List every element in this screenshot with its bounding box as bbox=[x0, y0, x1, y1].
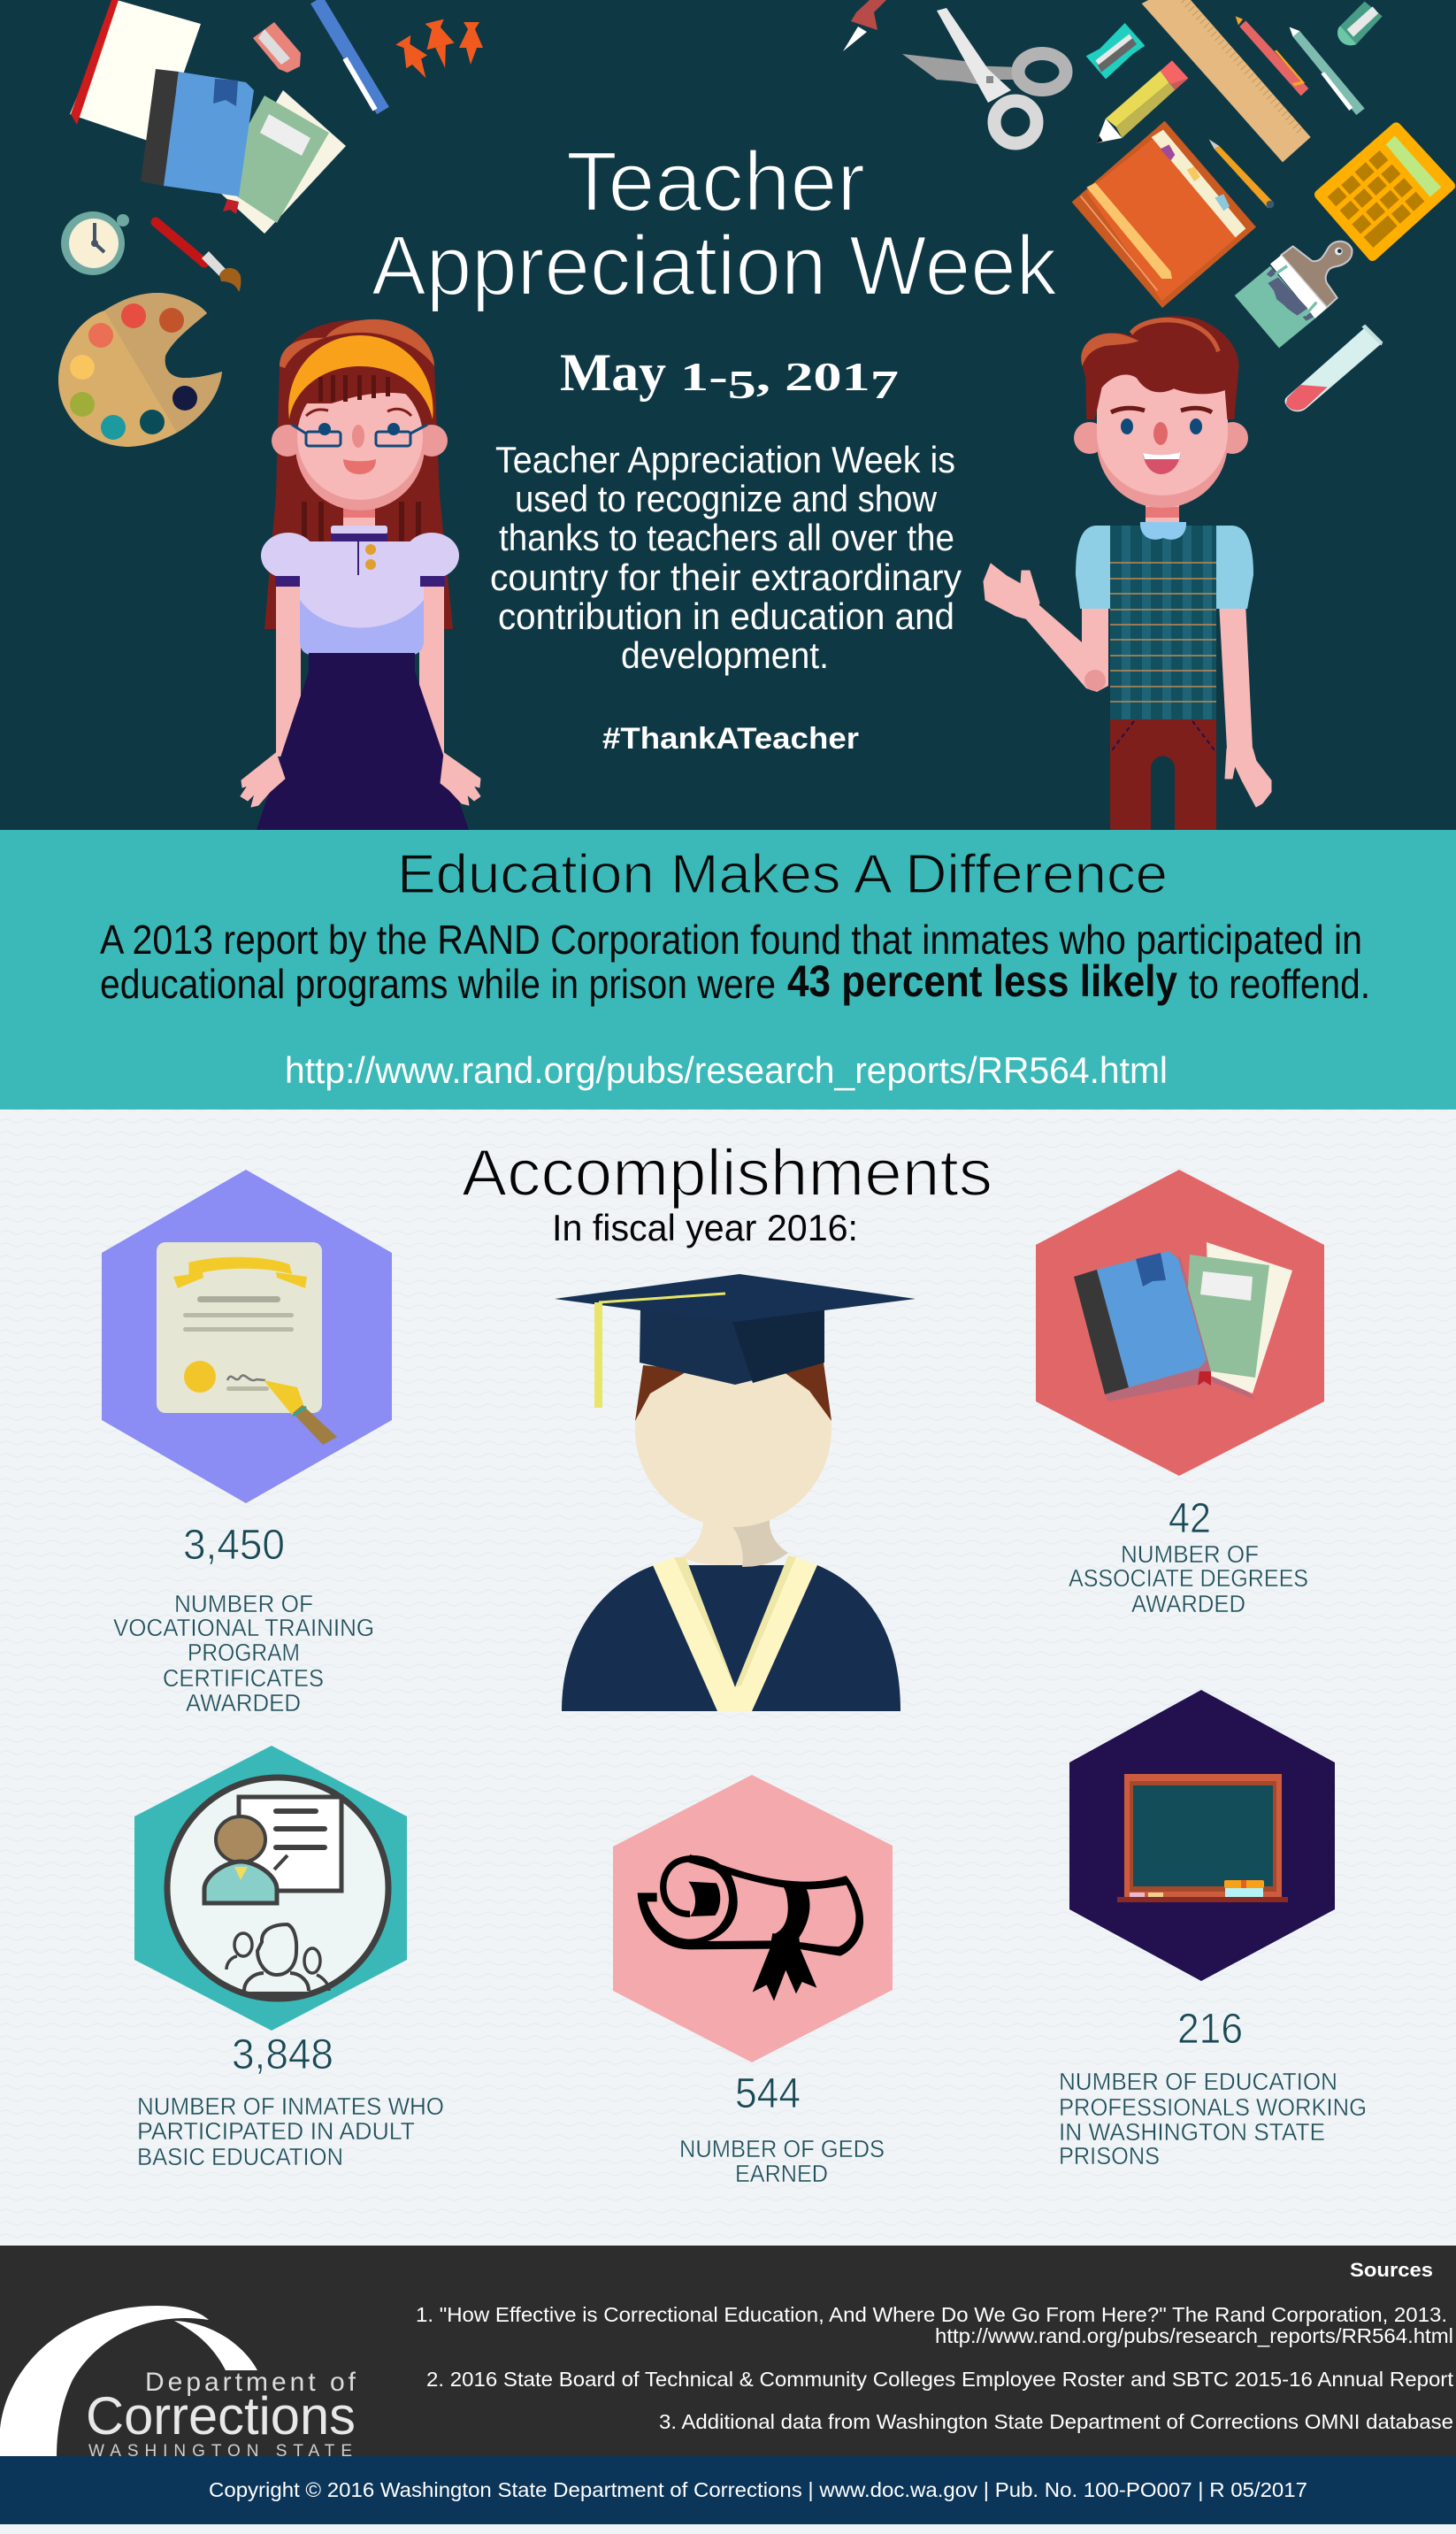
label: BASIC EDUCATION bbox=[137, 2143, 343, 2170]
logo: Department of Corrections: Corrections bbox=[86, 2386, 356, 2446]
icon: push pins bbox=[393, 18, 483, 84]
icon: blue pen bbox=[317, 0, 383, 111]
text block: RAND finding: to reoffend. bbox=[1189, 961, 1370, 1007]
value: 544 bbox=[735, 2070, 801, 2117]
text block: source list bbox=[416, 2303, 1454, 2433]
copyright text: Copyright © 2016 Washington State Department of Corrections | www.doc.wa.gov | Pub. No. 100-PO007 | R 05/2017 bbox=[209, 2478, 1307, 2501]
icon: test tube bbox=[1285, 325, 1383, 411]
icon: paint palette bbox=[58, 293, 222, 447]
icon: small pencil bbox=[1209, 139, 1274, 208]
label: PRISONS bbox=[1059, 2142, 1160, 2169]
hashtag: #ThankATeacher bbox=[602, 722, 859, 756]
text block: description: used to recognize and show bbox=[515, 478, 938, 519]
label: NUMBER OF GEDS bbox=[679, 2135, 885, 2162]
heading: sources: Sources bbox=[1350, 2259, 1433, 2281]
icon: white notebook bbox=[70, 0, 201, 142]
text block: source list: 3. Additional data from Washington State Department of Corrections OMNI database bbox=[659, 2410, 1453, 2433]
icon: paint brush red bbox=[156, 222, 241, 292]
date: 5 bbox=[728, 362, 756, 407]
icon: scissors bbox=[902, 8, 1066, 143]
value: 42 bbox=[1169, 1495, 1211, 1542]
value: 3,450 bbox=[183, 1522, 285, 1569]
icon: push pin red bbox=[843, 0, 886, 51]
subheading: In fiscal year 2016: bbox=[552, 1207, 858, 1248]
label: IN WASHINGTON STATE bbox=[1059, 2118, 1325, 2146]
value: 216 bbox=[1177, 2006, 1243, 2053]
icon: classroom bbox=[167, 1778, 388, 2001]
stat: adult basic education bbox=[134, 1746, 444, 2170]
date: , 201 bbox=[756, 354, 870, 399]
text block: source list: http://www.rand.org/pubs/research_reports/RR564.html bbox=[935, 2324, 1453, 2347]
text block: description bbox=[490, 439, 962, 676]
text block: description: contribution in education and bbox=[498, 595, 954, 637]
stat: vocational certificates bbox=[102, 1170, 392, 1716]
label: NUMBER OF bbox=[1121, 1540, 1259, 1568]
label: PARTICIPATED IN ADULT bbox=[137, 2117, 415, 2145]
label bbox=[113, 1590, 374, 1716]
icon: sharpener bbox=[1086, 23, 1145, 79]
panel: education makes a difference bbox=[0, 830, 1456, 1110]
panel: header bbox=[0, 0, 1456, 830]
title bbox=[372, 134, 1058, 313]
sleeves and vest bbox=[1026, 522, 1253, 749]
hands bbox=[984, 564, 1271, 807]
title: Teacher bbox=[566, 134, 865, 229]
text block: description: thanks to teachers all over the bbox=[499, 517, 954, 558]
blouse bbox=[261, 526, 459, 756]
label: ASSOCIATE DEGREES bbox=[1069, 1564, 1308, 1592]
panel: accomplishments bbox=[0, 1110, 1456, 2246]
logo: Department of Corrections bbox=[0, 2306, 356, 2461]
icon: graduate bbox=[555, 1274, 916, 1711]
label bbox=[679, 2135, 885, 2187]
label: NUMBER OF EDUCATION bbox=[1059, 2068, 1337, 2095]
icon: teal pen bbox=[1290, 27, 1365, 115]
label: AWARDED bbox=[1131, 1590, 1245, 1617]
icon: blue book bbox=[141, 69, 254, 196]
icon: orange book bbox=[1072, 121, 1256, 308]
icon: certificate bbox=[157, 1242, 337, 1445]
icon: ruler bbox=[1142, 0, 1311, 162]
logo: Department of Corrections: Department of bbox=[145, 2368, 356, 2397]
stat: education professionals bbox=[1059, 1690, 1367, 2169]
label bbox=[137, 2092, 444, 2170]
label bbox=[1069, 1540, 1308, 1617]
label: PROFESSIONALS WORKING bbox=[1059, 2093, 1367, 2121]
label: NUMBER OF INMATES WHO bbox=[137, 2092, 444, 2120]
icons: desk tools bbox=[1072, 0, 1450, 308]
icon: yellow pencil bbox=[1096, 60, 1188, 143]
label: PROGRAM bbox=[188, 1639, 300, 1666]
trousers bbox=[1110, 719, 1216, 830]
heading: Accomplishments bbox=[462, 1136, 992, 1209]
icon: green eraser bbox=[1337, 2, 1383, 45]
label: VOCATIONAL TRAINING bbox=[113, 1614, 374, 1641]
hair bbox=[1081, 316, 1238, 419]
hands bbox=[241, 753, 480, 807]
glasses bbox=[292, 425, 427, 446]
label: NUMBER OF bbox=[174, 1590, 313, 1617]
label: AWARDED bbox=[186, 1689, 301, 1716]
character: male teacher bbox=[984, 316, 1271, 830]
date: May bbox=[560, 343, 666, 402]
value: 3,848 bbox=[232, 2031, 333, 2078]
icon: stopwatch bbox=[61, 211, 129, 275]
date: 7 bbox=[870, 362, 899, 407]
skirt bbox=[257, 653, 469, 830]
panel: copyright bar bbox=[0, 2456, 1456, 2524]
icon: red pen bbox=[1236, 16, 1308, 96]
stat: associate degrees bbox=[1036, 1170, 1324, 1617]
date bbox=[560, 343, 899, 407]
icon: wide paint brush bbox=[1235, 242, 1353, 348]
link: http://www.rand.org/pubs/research_reports/RR564.html bbox=[285, 1049, 1168, 1091]
icon: chalkboard bbox=[1117, 1774, 1288, 1902]
text block: RAND finding bbox=[100, 917, 1370, 1007]
icon: books bbox=[1074, 1242, 1292, 1401]
icon: eraser bbox=[253, 22, 301, 73]
character: female teacher bbox=[241, 319, 480, 830]
text block: description: country for their extraordinary bbox=[490, 557, 962, 598]
text block: RAND finding: 43 percent less likely bbox=[787, 956, 1177, 1006]
icon: calculator bbox=[1320, 127, 1450, 256]
date: 1- bbox=[680, 354, 714, 399]
label bbox=[1059, 2068, 1367, 2169]
icon: green notebook bbox=[221, 90, 346, 234]
panel: sources footer bbox=[0, 2246, 1456, 2461]
text block: description: development. bbox=[621, 634, 829, 676]
title: Appreciation Week bbox=[372, 219, 1058, 313]
label: EARNED bbox=[735, 2160, 828, 2187]
label: CERTIFICATES bbox=[163, 1664, 324, 1692]
text block: description: Teacher Appreciation Week is bbox=[495, 439, 955, 480]
heading: Education Makes A Difference bbox=[397, 844, 1168, 905]
icon: diploma scroll bbox=[638, 1854, 863, 2001]
stat: GEDs earned bbox=[613, 1775, 893, 2187]
text block: source list: 2. 2016 State Board of Technical & Community Colleges Employee Roster and SBTC 2015-16 Annual Report bbox=[426, 2368, 1454, 2391]
logo: Department of Corrections: WASHINGTON STATE bbox=[88, 2442, 352, 2461]
text block: source list: 1. "How Effective is Correctional Education, And Where Do We Go From Here?" The Rand Corporation, 2013. bbox=[416, 2303, 1447, 2326]
text block: RAND finding: educational programs while in prison were bbox=[100, 961, 776, 1007]
